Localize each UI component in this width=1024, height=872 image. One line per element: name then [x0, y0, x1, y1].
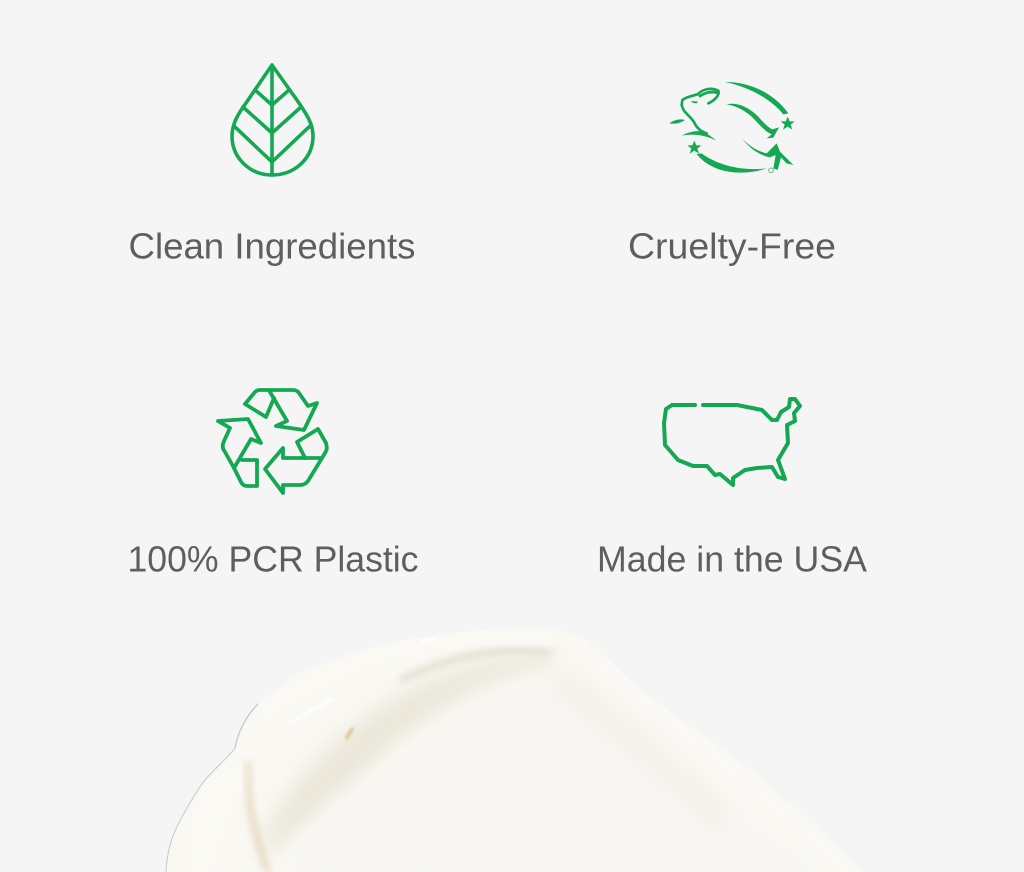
icon: USA map outline	[664, 399, 800, 485]
label: Made in the USA: Made in the USA	[597, 538, 867, 580]
cream swatch	[166, 637, 719, 872]
icon: leaping rabbit	[669, 82, 795, 173]
label: Clean Ingredients: Clean Ingredients	[128, 226, 416, 266]
icon: leaf	[232, 65, 313, 175]
icon: recycling arrows	[218, 390, 327, 493]
label: 100% PCR Plastic: 100% PCR Plastic	[128, 538, 418, 580]
label: Cruelty-Free: Cruelty-Free	[628, 226, 836, 266]
